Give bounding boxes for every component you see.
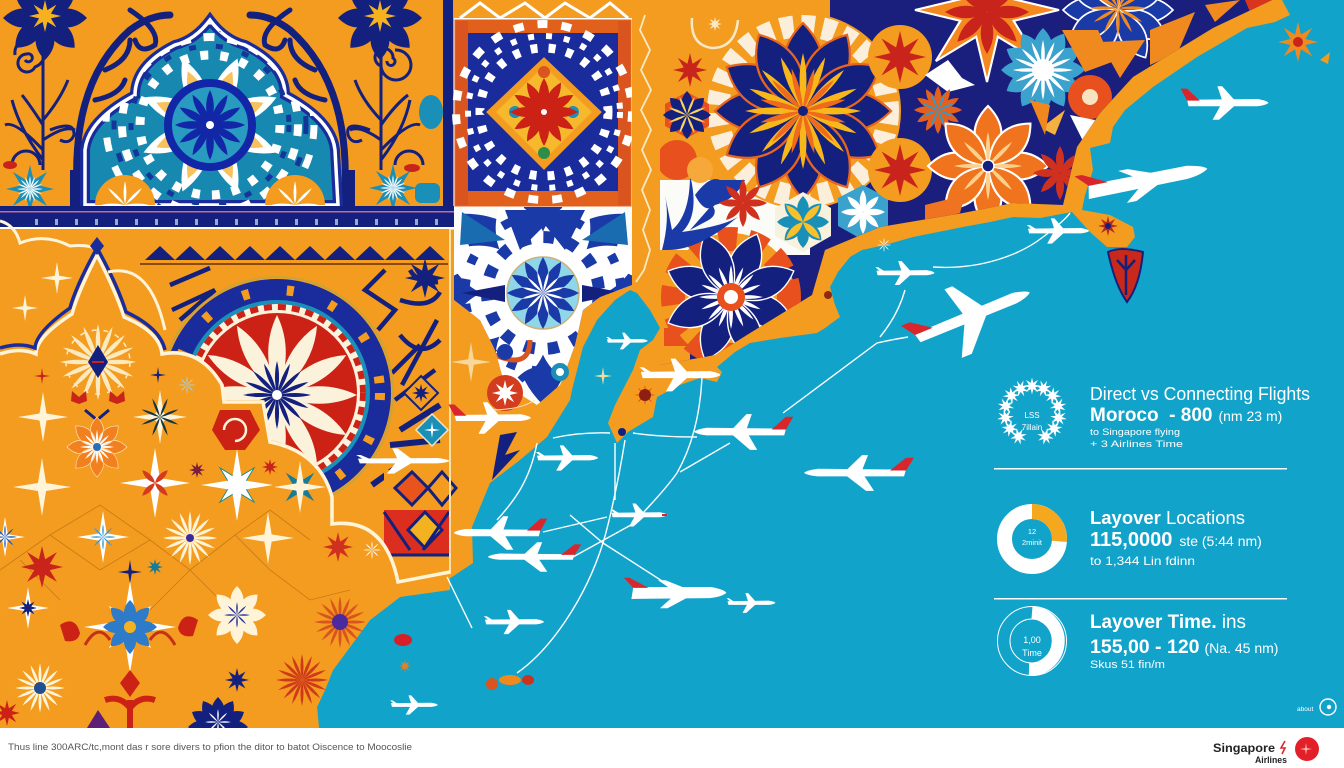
airline logo: Airlines [1255, 755, 1287, 765]
planes [356, 86, 1269, 715]
panel: lower arch frame with large rosette [0, 229, 456, 574]
donut chart: locations [1004, 512, 1060, 566]
icon: orange sun [292, 574, 388, 670]
footer note: Thus line 300ARC/tc,mont das r sore divers to pfion the ditor to batot Oiscence to Moocoslie [8, 742, 412, 753]
panel: vertical orange stripe [632, 0, 660, 283]
about icon: about [1297, 706, 1313, 713]
stat: direct vs connecting [996, 377, 1310, 450]
about icon [1297, 699, 1336, 715]
icon: top-right rosettes [868, 0, 1278, 202]
donut chart: time: 1,00 [1023, 635, 1041, 645]
icon: large navy sunburst [707, 15, 901, 206]
stat: layover time: 155,00 - 120 (Na. 45 nm) [1090, 636, 1278, 658]
icon: navy arabesque around arch [70, 10, 355, 206]
panel: centre top tile [454, 0, 632, 207]
stat: layover time: Layover Time. ins [1090, 612, 1246, 633]
icon: side medallions [404, 376, 448, 446]
icon: left floral column [0, 0, 104, 213]
icon: lobed arch [80, 12, 343, 206]
icon: star wreath: 7illain [1022, 423, 1042, 432]
icon: blue leaves on white [662, 175, 745, 250]
stat: direct vs connecting: Direct vs Connecting Flights [1090, 384, 1310, 404]
stat: layover locations: to 1,344 Lin fdinn [1090, 554, 1195, 568]
icon: lower navy rosette [661, 227, 801, 358]
stat: layover time [998, 606, 1278, 676]
icon: white navy flower [196, 574, 278, 656]
airline logo [1213, 737, 1319, 765]
icon: large blue flower [84, 581, 176, 673]
motifs: lower-left stars [0, 262, 388, 768]
icon: star wreath [996, 377, 1068, 448]
airline logo: Singapore [1213, 743, 1275, 755]
icon: tile medallions [660, 91, 888, 252]
icon: orange flower [926, 104, 1048, 210]
icon: star wreath: LSS [1024, 411, 1040, 420]
icon: orange mandala [55, 405, 139, 489]
donut chart: time: Time [1022, 648, 1042, 658]
panel: top-left arch [3, 0, 443, 206]
islands and coastal ornaments [394, 22, 1330, 690]
stats panel [994, 377, 1336, 715]
icon: central ornament [28, 292, 168, 432]
panel: upper-right mosaic [660, 0, 1272, 365]
icon: red fleur [105, 699, 155, 730]
panel: centre lower tile [451, 207, 632, 480]
footer band [0, 728, 1344, 768]
icon: red tile [212, 410, 260, 450]
stat: layover locations: Layover Locations [1090, 508, 1245, 528]
flight routes [447, 213, 1070, 673]
stat: direct vs connecting: to Singapore flying [1090, 427, 1180, 438]
donut chart: locations: 2minit [1022, 538, 1043, 547]
donut chart: locations: 12 [1028, 527, 1036, 536]
divider [994, 468, 1287, 470]
icon: navy arabesque fill [170, 258, 445, 485]
icon: crescent [692, 17, 738, 48]
donut chart: time [998, 606, 1066, 676]
icon: triangle frieze [145, 246, 445, 260]
icon: navy star [177, 686, 259, 768]
stat: layover locations [1004, 508, 1262, 568]
panel: scalloped foreground [0, 221, 450, 728]
divider [994, 598, 1287, 600]
stat: layover locations: 115,0000 ste (5:44 nm) [1090, 529, 1262, 551]
stat: direct vs connecting: + 3 Airlines Time [1090, 439, 1183, 450]
band: navy divider [0, 0, 454, 230]
icon: right floral column [321, 0, 443, 212]
stat: layover time: Skus 51 fin/m [1090, 659, 1165, 671]
stat: direct vs connecting: Moroco - 800 (nm 23 m) [1090, 405, 1282, 426]
icon: diamond lattice [384, 470, 456, 560]
icon: big red and cream rosette [161, 277, 393, 509]
